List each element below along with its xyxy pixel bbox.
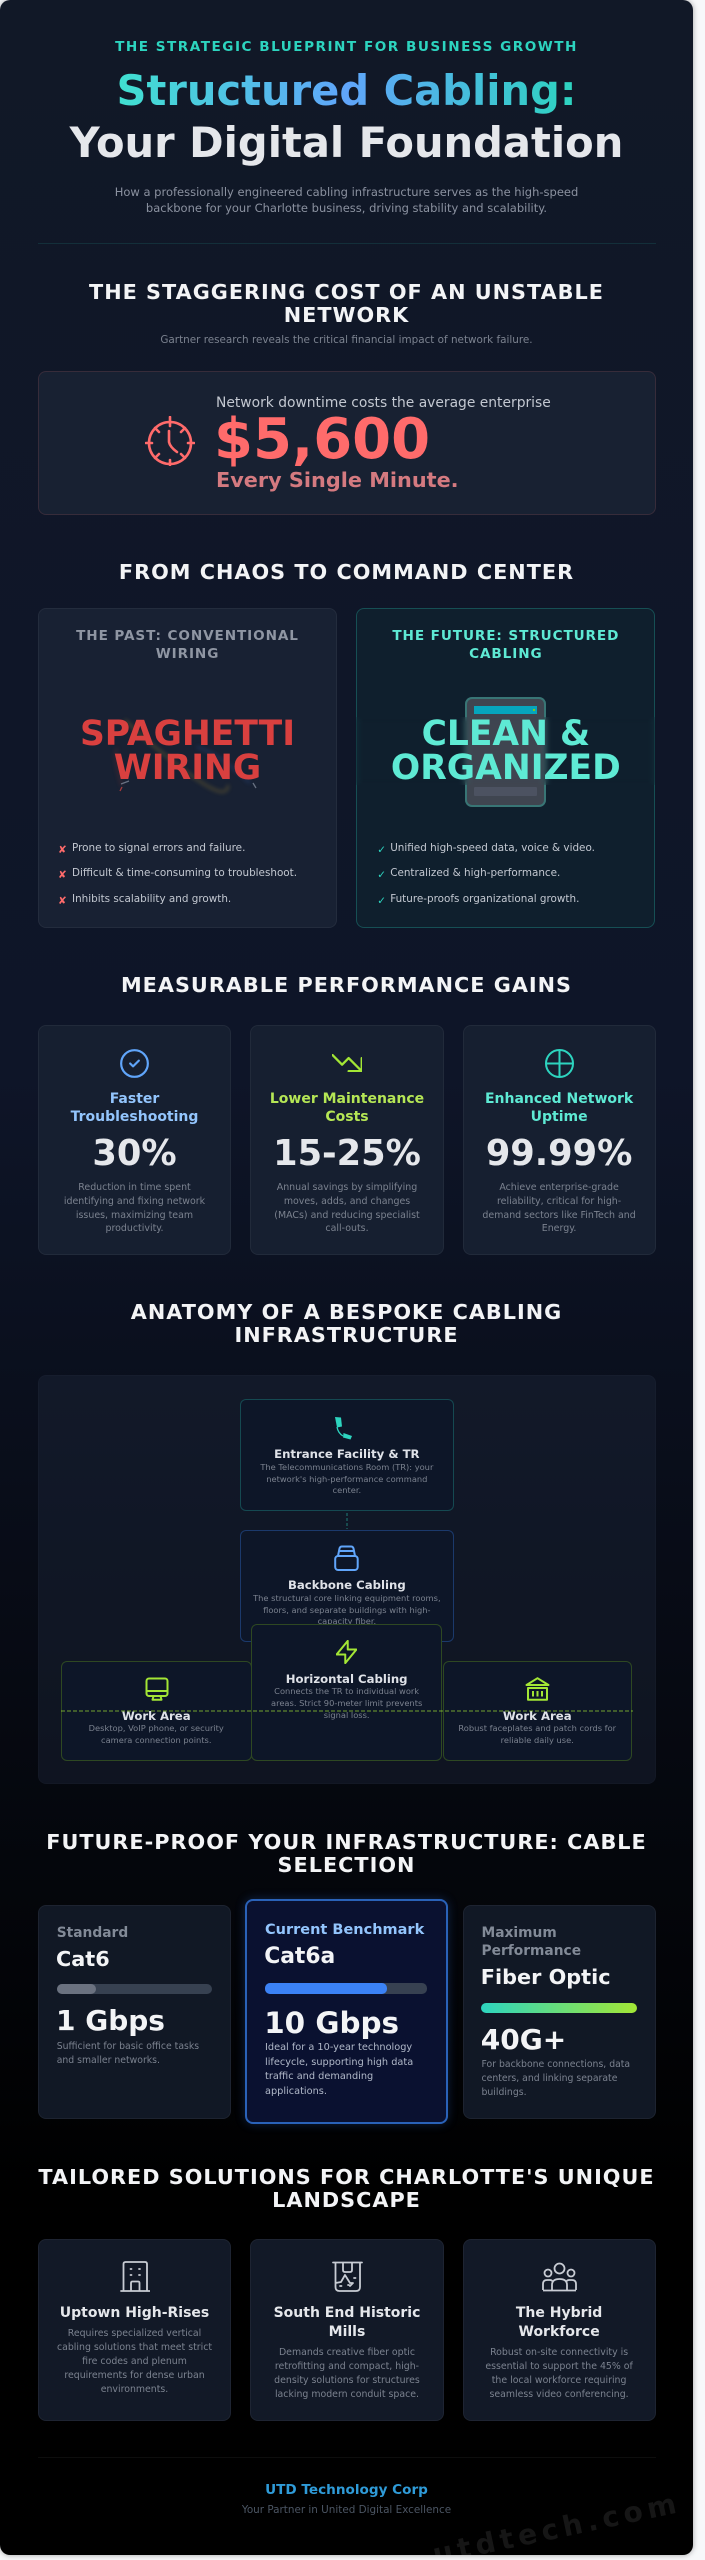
description xyxy=(481,2058,630,2100)
solution card: uptown xyxy=(38,2239,231,2421)
tier label: Maximum xyxy=(481,1925,557,1941)
tier label xyxy=(481,1924,581,1961)
card text: Demands creative fiber optic xyxy=(279,2347,415,2358)
heading: cost of unstable network: NETWORK xyxy=(284,302,409,326)
stat number: 99.99% xyxy=(486,1133,632,1174)
illustration: server rack xyxy=(465,696,546,806)
heading: anatomy: ANATOMY OF A BESPOKE CABLING xyxy=(131,1300,562,1324)
box title: Entrance Facility & TR xyxy=(274,1447,420,1461)
description: For backbone connections, data xyxy=(481,2059,630,2070)
panel: the future xyxy=(356,608,655,928)
stat description xyxy=(274,1182,420,1234)
panel heading: THE PAST: CONVENTIONAL xyxy=(76,628,299,644)
footer: company name: UTD Technology Corp xyxy=(265,2482,428,2498)
card title: South End Historic xyxy=(274,2305,420,2321)
icon: check circle xyxy=(120,1049,149,1078)
stat card: uptime xyxy=(463,1025,656,1255)
subtitle: backbone for your Charlotte business, driving stability and scalability. xyxy=(146,201,547,215)
card text xyxy=(250,2346,444,2401)
stat title: Faster xyxy=(110,1091,159,1107)
connector: entrance to backbone xyxy=(346,1513,348,1529)
description: applications. xyxy=(265,2086,327,2097)
icon: trending down xyxy=(332,1054,362,1072)
box: horizontal cabling xyxy=(251,1624,442,1761)
connector: horizontal run xyxy=(61,1710,633,1712)
box text xyxy=(458,1723,616,1745)
box text: capacity fiber. xyxy=(318,1616,376,1626)
cable card: Cat6a xyxy=(245,1899,448,2124)
stat description: (MACs) and reducing specialist xyxy=(274,1210,420,1221)
stat title: Troubleshooting xyxy=(71,1109,198,1125)
icon: clock xyxy=(145,416,195,466)
illustration caption xyxy=(356,714,655,788)
box title: Work Area xyxy=(122,1709,191,1723)
item: Centralized & high-performance. xyxy=(390,867,560,879)
stat description: Energy. xyxy=(542,1223,576,1234)
box: backbone cabling xyxy=(240,1530,454,1642)
stat description: Reduction in time spent xyxy=(78,1182,191,1193)
card title: Mills xyxy=(329,2324,365,2340)
card text: lacking modern conduit space. xyxy=(275,2389,419,2400)
solution card: south end xyxy=(250,2239,444,2421)
emphasis text: Every Single Minute. xyxy=(216,468,459,492)
illustration caption: WIRING xyxy=(114,748,261,788)
card text: seamless video conferencing. xyxy=(490,2389,629,2400)
stat description: issues, maximizing team xyxy=(76,1210,193,1221)
box text: The structural core linking equipment rooms, xyxy=(253,1593,441,1603)
subtitle: How a professionally engineered cabling infrastructure serves as the high-speed xyxy=(115,185,578,199)
stat description xyxy=(64,1182,205,1234)
box text: Desktop, VoIP phone, or security xyxy=(89,1723,224,1733)
cable card: Cat6 xyxy=(38,1905,231,2119)
lead text: Network downtime costs the average enterprise xyxy=(216,395,551,411)
item: ✘ xyxy=(58,844,67,856)
heading: anatomy xyxy=(130,1300,562,1347)
icon: historic mill xyxy=(332,2261,363,2292)
box title: Work Area xyxy=(503,1709,572,1723)
stat title xyxy=(485,1091,634,1125)
box title: Horizontal Cabling xyxy=(286,1672,408,1686)
box text: signal loss. xyxy=(324,1710,370,1720)
panel: anatomy diagram xyxy=(38,1375,656,1784)
box text: Connects the TR to individual work xyxy=(274,1686,419,1696)
tier label: Standard xyxy=(57,1925,128,1941)
card title: Uptown High-Rises xyxy=(60,2305,209,2321)
box: work area right xyxy=(442,1661,632,1761)
speed bar xyxy=(481,2003,637,2013)
description xyxy=(265,2041,413,2099)
tier label: Current Benchmark xyxy=(265,1922,424,1938)
stat description: reliability, critical for high- xyxy=(497,1196,621,1207)
illustration: tangled wires xyxy=(114,719,256,794)
stat title: Lower Maintenance xyxy=(270,1091,424,1107)
icon: desktop xyxy=(146,1678,168,1701)
kicker: THE STRATEGIC BLUEPRINT FOR BUSINESS GROWTH xyxy=(115,39,578,55)
item: ✓ xyxy=(377,895,386,907)
speed: 40G+ xyxy=(481,2023,566,2056)
heading: cost of unstable network: THE STAGGERING COST OF AN UNSTABLE xyxy=(89,280,604,304)
stat description: Achieve enterprise-grade xyxy=(499,1182,619,1193)
speed: 10 Gbps xyxy=(264,2006,399,2040)
description xyxy=(57,2040,199,2067)
card text xyxy=(463,2346,656,2401)
card text: essential to support the 45% of xyxy=(485,2361,633,2372)
box text xyxy=(260,1462,434,1495)
card title xyxy=(250,2304,444,2341)
icon: globe xyxy=(545,1049,574,1078)
cable card: Fiber xyxy=(463,1905,656,2119)
list: past problems xyxy=(58,842,297,907)
stat number: 30% xyxy=(92,1133,177,1174)
description: lifecycle, supporting high data xyxy=(265,2057,413,2068)
item xyxy=(377,842,595,1062)
description: centers, and linking separate xyxy=(481,2073,617,2084)
stat description: identifying and fixing network xyxy=(64,1196,205,1207)
panel heading: THE FUTURE: STRUCTURED xyxy=(392,628,619,644)
box text: camera connection points. xyxy=(101,1735,211,1745)
box text: center. xyxy=(333,1485,361,1495)
stat title: Costs xyxy=(325,1109,369,1125)
item: ✘ xyxy=(58,895,67,907)
description: traffic and demanding xyxy=(265,2071,373,2082)
heading: cable selection: SELECTION xyxy=(278,1852,415,1876)
card title: The Hybrid xyxy=(516,2305,602,2321)
heading: cable selection: FUTURE-PROOF YOUR INFRASTRUCTURE: CABLE xyxy=(46,1830,647,1854)
item: Prone to signal errors and failure. xyxy=(72,842,245,854)
speed bar xyxy=(57,1984,212,1994)
heading: anatomy: INFRASTRUCTURE xyxy=(234,1323,459,1347)
rack status bar xyxy=(474,706,537,714)
item: Future-proofs organizational growth. xyxy=(390,893,579,905)
speed bar xyxy=(265,1983,427,1994)
description: buildings. xyxy=(481,2087,527,2098)
card text: Requires specialized vertical xyxy=(68,2328,201,2339)
heading: charlotte landscape: TAILORED SOLUTIONS FOR CHARLOTTE'S UNIQUE xyxy=(38,2165,655,2189)
stat number: 15-25% xyxy=(273,1133,421,1174)
solution card: hybrid workforce xyxy=(463,2239,656,2421)
box text xyxy=(89,1723,224,1745)
item: Unified high-speed data, voice & video. xyxy=(390,842,595,854)
illustration caption xyxy=(80,714,295,788)
panel heading xyxy=(76,628,299,662)
box: entrance facility xyxy=(240,1399,454,1511)
description: and smaller networks. xyxy=(57,2055,160,2066)
box text: network's high-performance command xyxy=(266,1474,427,1484)
heading: cable selection xyxy=(46,1830,647,1876)
cable name: Cat6a xyxy=(264,1944,335,1969)
item: ✓ xyxy=(377,869,386,881)
stat description: moves, adds, and changes xyxy=(284,1196,410,1207)
cable name: Fiber Optic xyxy=(481,1965,611,1989)
panel heading xyxy=(392,628,619,662)
heading: cost of unstable network xyxy=(89,280,604,326)
description: Ideal for a 10-year technology xyxy=(265,2042,412,2053)
footer: tagline: Your Partner in United Digital Excellence xyxy=(242,2504,451,2516)
box text: reliable daily use. xyxy=(501,1735,574,1745)
tier label: Performance xyxy=(481,1943,581,1959)
card title: Workforce xyxy=(518,2324,600,2340)
title xyxy=(69,66,623,166)
stat title: Uptime xyxy=(531,1109,588,1125)
item: Difficult & time-consuming to troubleshoot. xyxy=(72,867,297,879)
icon: user group xyxy=(542,2262,577,2292)
subtitle xyxy=(115,185,578,215)
box text: Robust faceplates and patch cords for xyxy=(458,1723,616,1733)
panel: the past xyxy=(38,608,337,928)
card text: the local workforce requiring xyxy=(492,2375,626,2386)
stat description xyxy=(482,1182,636,1234)
panel heading: CABLING xyxy=(469,646,543,662)
heading: charlotte landscape xyxy=(0,2166,693,2212)
icon: office building xyxy=(120,2261,150,2292)
card text: density solutions for structures xyxy=(274,2375,420,2386)
icon: phone xyxy=(335,1417,352,1440)
stat title: Enhanced Network xyxy=(485,1091,633,1107)
stat title xyxy=(270,1091,424,1125)
heading: charlotte landscape: LANDSCAPE xyxy=(272,2188,421,2212)
cable name: Cat6 xyxy=(56,1947,110,1971)
list: future benefits xyxy=(377,842,595,1062)
stat title xyxy=(70,1091,198,1125)
card text xyxy=(38,2327,231,2397)
section subtitle: Gartner research reveals the critical financial impact of network failure. xyxy=(160,334,533,346)
box text xyxy=(271,1686,422,1720)
stat card: maintenance xyxy=(250,1025,444,1255)
icon: bolt xyxy=(336,1640,357,1664)
card title xyxy=(463,2304,656,2341)
title: Structured Cabling: xyxy=(116,66,576,114)
speed: 1 Gbps xyxy=(56,2004,165,2037)
card text: cabling solutions that meet strict xyxy=(57,2342,212,2353)
illustration caption: SPAGHETTI xyxy=(80,714,295,754)
icon: bank xyxy=(526,1677,550,1701)
stat description: call-outs. xyxy=(325,1223,369,1234)
card text: fire codes and plenum xyxy=(82,2356,187,2367)
stat description: demand sectors like FinTech and xyxy=(482,1210,636,1221)
illustration caption: ORGANIZED xyxy=(391,748,621,788)
box title: Backbone Cabling xyxy=(288,1578,406,1592)
box: work area left xyxy=(61,1661,252,1761)
title: Your Digital Foundation xyxy=(70,118,623,166)
item: ✓ xyxy=(377,844,386,856)
big number: $5,600 xyxy=(214,407,430,472)
item: Inhibits scalability and growth. xyxy=(72,893,231,905)
panel: downtime cost xyxy=(38,371,656,515)
stat description: productivity. xyxy=(105,1223,164,1234)
description: Sufficient for basic office tasks xyxy=(57,2041,199,2052)
card text: Robust on-site connectivity is xyxy=(490,2347,628,2358)
heading: performance gains: MEASURABLE PERFORMANCE GAINS xyxy=(121,972,572,996)
rack bottom bar xyxy=(474,786,537,796)
stat description: Annual savings by simplifying xyxy=(277,1182,417,1193)
card text: retrofitting and compact, high- xyxy=(275,2361,419,2372)
card text: requirements for dense urban xyxy=(64,2370,205,2381)
heading: chaos to command: FROM CHAOS TO COMMAND CENTER xyxy=(119,560,574,584)
box text xyxy=(253,1593,441,1626)
box text: The Telecommunications Room (TR): your xyxy=(260,1462,433,1472)
stat card: troubleshooting xyxy=(38,1025,231,1255)
illustration caption: CLEAN & xyxy=(422,714,590,754)
box text: floors, and separate buildings with high- xyxy=(263,1605,431,1615)
card text: environments. xyxy=(101,2384,168,2395)
box text: areas. Strict 90-meter limit prevents xyxy=(271,1698,422,1708)
item: ✘ xyxy=(58,869,67,881)
panel heading: WIRING xyxy=(156,646,219,662)
icon: backbone xyxy=(334,1546,359,1571)
